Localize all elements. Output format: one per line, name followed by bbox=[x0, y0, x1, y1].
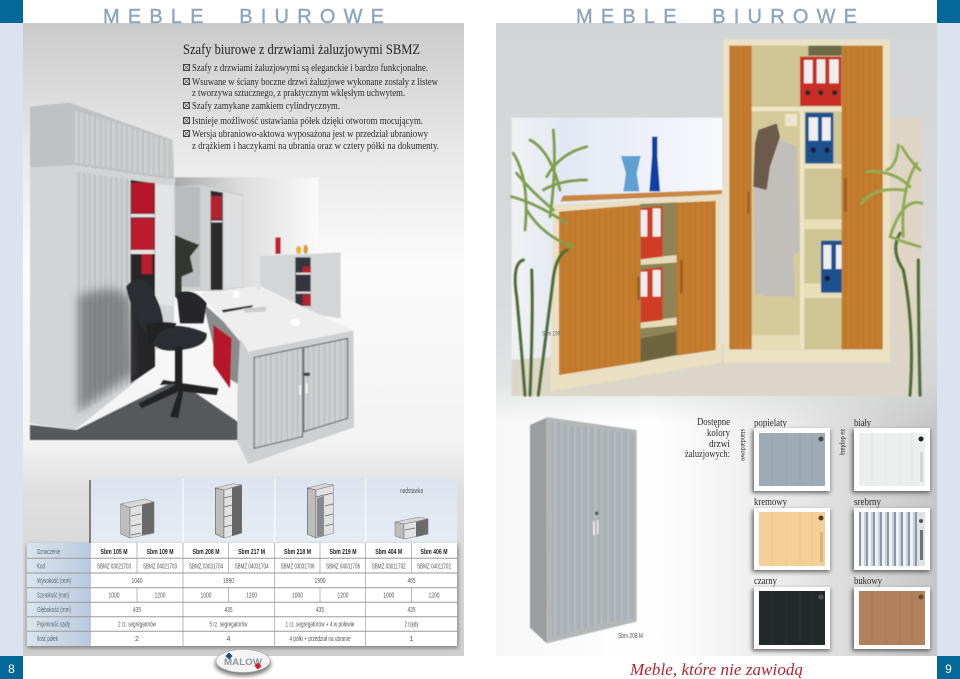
low back cabinet bbox=[260, 237, 341, 318]
codes row: SBMZ 03031704 bbox=[189, 564, 223, 570]
label: available colours bbox=[685, 417, 731, 460]
feature 5: Wersja ubraniowo-aktowa wyposażona jest w przedział ubraniowy bbox=[192, 129, 429, 140]
row labels bbox=[37, 549, 71, 643]
tall cabinet bbox=[30, 103, 175, 430]
top left corner block bbox=[0, 0, 23, 23]
coat bbox=[753, 133, 800, 297]
low front cabinet bbox=[237, 331, 354, 464]
row labels: Wysokość (mm) bbox=[37, 578, 71, 585]
caption Sbm 208 M: Sbm 208 M bbox=[618, 633, 643, 640]
width row: 1200 bbox=[154, 592, 166, 600]
shelves row: 4 półki + przedział na ubranie bbox=[290, 636, 351, 643]
row label column bbox=[27, 543, 91, 646]
right door bbox=[597, 429, 634, 624]
red drawer bbox=[213, 325, 232, 388]
wall right bbox=[889, 118, 922, 396]
handles bbox=[593, 512, 599, 535]
swatch: biały: biały bbox=[854, 418, 872, 429]
depth row: 435 bbox=[408, 607, 416, 614]
swatch: bukowy bbox=[852, 576, 930, 651]
width row: 1200 bbox=[246, 592, 257, 600]
table shadow bbox=[27, 545, 458, 648]
row labels: Kod bbox=[37, 564, 45, 570]
row labels: Szerokość (mm) bbox=[37, 592, 69, 600]
shelves row: 4 bbox=[227, 636, 231, 643]
bullet icon 1 bbox=[184, 64, 190, 70]
specification table bbox=[27, 543, 458, 648]
left page header: MEBLE BIUROWE bbox=[103, 6, 384, 28]
swatch: srebrny bbox=[852, 497, 930, 572]
swatch: bukowy: bukowy bbox=[854, 576, 883, 587]
codes row: SBMZ 04021703 bbox=[143, 564, 177, 570]
bullet icon 2 bbox=[184, 78, 190, 84]
row lines bbox=[27, 558, 457, 631]
page number 8: 8 bbox=[8, 662, 15, 676]
width row: 1000 bbox=[200, 592, 212, 600]
logo bbox=[215, 650, 271, 676]
low cabinet bbox=[550, 190, 722, 392]
codes row: SBMZ 04031704 bbox=[235, 564, 269, 570]
codes row: SBMZ 04031706 bbox=[326, 564, 360, 570]
row labels: Głębokość (mm) bbox=[37, 607, 71, 614]
left bamboo plant bbox=[512, 130, 587, 395]
column lines bbox=[137, 543, 412, 646]
feature 2: z tworzywa sztucznego, z praktycznym wklęsłym uchwytem. bbox=[192, 88, 405, 99]
slogan: Meble, które nie zawiodą bbox=[629, 660, 803, 679]
height row: 1990 bbox=[314, 578, 326, 585]
chair shadow bbox=[78, 289, 133, 412]
shelves row bbox=[135, 636, 414, 643]
label: available colours: Dostępne bbox=[697, 417, 730, 428]
right page background panel bbox=[496, 23, 937, 656]
width row bbox=[108, 592, 440, 600]
swatch: kremowy bbox=[752, 497, 830, 572]
red binders bbox=[800, 57, 841, 106]
codes row: SBMZ 04011702 bbox=[417, 564, 451, 570]
desk top bbox=[200, 286, 353, 352]
bullet icon 3 bbox=[184, 102, 190, 108]
icon: cabinet Sbm 218 bbox=[307, 484, 334, 538]
background cabinet bbox=[175, 185, 243, 292]
width row: 1000 bbox=[383, 592, 394, 600]
height row: 465 bbox=[408, 578, 416, 585]
capacity row: 2 rz. segregatorów bbox=[118, 622, 157, 628]
model names row: Sbm 208 M bbox=[192, 547, 220, 556]
caption Sbm 109: Sbm 109 bbox=[542, 331, 560, 338]
label: available colours: kolory bbox=[707, 428, 731, 439]
swatch: kremowy: kremowy bbox=[754, 497, 788, 508]
backdrop bbox=[175, 177, 318, 291]
glass vase bbox=[621, 156, 641, 191]
colour options bbox=[685, 417, 930, 651]
label: available colours: drzwi bbox=[709, 439, 730, 450]
icon: cabinet Sbm 208 bbox=[215, 484, 242, 538]
page number 8 bbox=[0, 656, 23, 679]
label: available colours: żaluzjowych: bbox=[685, 449, 730, 460]
swatch: popielaty bbox=[752, 418, 830, 493]
capacity row: 5 rz. segregatorów bbox=[210, 622, 248, 628]
width row: 1000 bbox=[292, 592, 303, 600]
plant bbox=[175, 235, 199, 303]
left door bbox=[552, 422, 596, 637]
office chair bbox=[126, 279, 218, 418]
page number 9 bbox=[937, 656, 960, 679]
logo: MALOW bbox=[224, 657, 262, 668]
feature 2: Wsuwane w ściany boczne drzwi żaluzjowe wykonane zostały z listew bbox=[192, 77, 439, 88]
model names row bbox=[100, 547, 448, 556]
icon: top unit bbox=[395, 517, 428, 539]
feature 4: Istnieje możliwość ustawiania półek dzięki otworom mocującym. bbox=[192, 116, 423, 127]
blue bottle bbox=[649, 137, 660, 191]
label on wall bbox=[785, 114, 797, 126]
top right corner block bbox=[937, 0, 960, 23]
feature list bbox=[184, 63, 439, 152]
cell shadow bbox=[89, 480, 91, 543]
depth row: 435 bbox=[224, 607, 233, 614]
swatch: czarny bbox=[752, 576, 830, 651]
model names row: Sbm 406 M bbox=[420, 547, 448, 556]
bullet icon 5 bbox=[184, 130, 190, 136]
model names row: Sbm 217 M bbox=[238, 547, 265, 556]
height row bbox=[132, 578, 416, 585]
row labels: Pojemność szafy bbox=[37, 622, 70, 628]
codes row: SBMZ 03031706 bbox=[280, 564, 315, 570]
scarf bbox=[753, 123, 780, 190]
wall left bbox=[512, 118, 722, 396]
illustration cell background bbox=[91, 479, 457, 543]
right bamboo plant bbox=[862, 145, 922, 395]
right page header: MEBLE BIUROWE bbox=[576, 6, 857, 28]
capacity row: 2 rzędy bbox=[404, 622, 419, 628]
width row: 1000 bbox=[108, 592, 120, 600]
feature 5 bbox=[192, 129, 439, 152]
dividers bbox=[183, 479, 366, 543]
row labels: Ilość półek bbox=[37, 636, 58, 643]
model names row: Sbm 105 M bbox=[100, 547, 128, 556]
codes row: SBMZ 03011702 bbox=[372, 564, 406, 570]
bullet icon 4 bbox=[184, 118, 190, 124]
desk items bbox=[222, 280, 300, 326]
blue binders upper bbox=[805, 113, 833, 163]
blue binders lower bbox=[821, 241, 842, 293]
height row: 1990 bbox=[223, 578, 234, 585]
swatch: srebrny: srebrny bbox=[854, 497, 882, 508]
model names row: Sbm 109 M bbox=[146, 547, 174, 556]
left side strip bbox=[0, 23, 23, 656]
table body bbox=[91, 543, 457, 646]
model names row: Sbm 218 M bbox=[284, 547, 311, 556]
model names row: Sbm 404 M bbox=[375, 547, 402, 556]
cabinets photo bbox=[512, 39, 922, 396]
carpet bbox=[30, 380, 240, 440]
frame bbox=[546, 417, 637, 643]
codes row: SBMZ 03021703 bbox=[97, 564, 131, 570]
feature 1: Szafy z drzwiami żaluzjowymi są eleganckie i bardzo funkcjonalne. bbox=[192, 63, 428, 74]
office photo bbox=[30, 103, 354, 464]
side bbox=[530, 418, 547, 643]
icon: cabinet Sbm 105 bbox=[121, 499, 154, 538]
shelves row: 2 bbox=[135, 636, 139, 643]
desk pedestal bbox=[203, 303, 248, 390]
table cabinet illustrations bbox=[89, 479, 457, 543]
label: extra charge: za dopłatą bbox=[839, 429, 847, 456]
label: standard: standardowe bbox=[739, 429, 747, 461]
feature 5: z drążkiem i haczykami na ubrania oraz w cztery półki na dokumenty. bbox=[192, 141, 439, 152]
tall cabinet bbox=[723, 39, 890, 363]
floor bbox=[512, 330, 922, 396]
page number 9: 9 bbox=[945, 662, 952, 676]
capacity row: 1 rz. segregatorów + 4 w połowie bbox=[286, 622, 355, 628]
width row: 1200 bbox=[338, 592, 349, 600]
product title: Szafy biurowe z drzwiami żaluzjowymi SBMZ bbox=[183, 42, 420, 58]
left page background panel bbox=[23, 23, 464, 656]
doors bbox=[729, 46, 752, 349]
swatch: biały bbox=[852, 418, 930, 493]
swatch: popielaty: popielaty bbox=[754, 418, 788, 429]
depth row bbox=[133, 607, 416, 614]
cabinet Sbm 208 M photo bbox=[530, 417, 637, 643]
swatch: czarny: czarny bbox=[754, 576, 778, 587]
shelves row: 1 bbox=[410, 636, 414, 643]
right side strip bbox=[937, 23, 960, 656]
height row: 1040 bbox=[132, 578, 143, 585]
codes row bbox=[97, 564, 451, 570]
label: nadstawka: nadstawka bbox=[400, 488, 423, 495]
depth row: 435 bbox=[316, 607, 324, 614]
model names row: Sbm 219 M bbox=[330, 547, 356, 556]
feature 2 bbox=[192, 77, 439, 99]
width row: 1200 bbox=[428, 592, 440, 600]
feature 3: Szafy zamykane zamkiem cylindrycznym. bbox=[192, 101, 340, 112]
capacity row bbox=[118, 622, 419, 628]
depth row: 435 bbox=[133, 607, 141, 614]
row labels: Oznaczenie bbox=[37, 549, 60, 556]
